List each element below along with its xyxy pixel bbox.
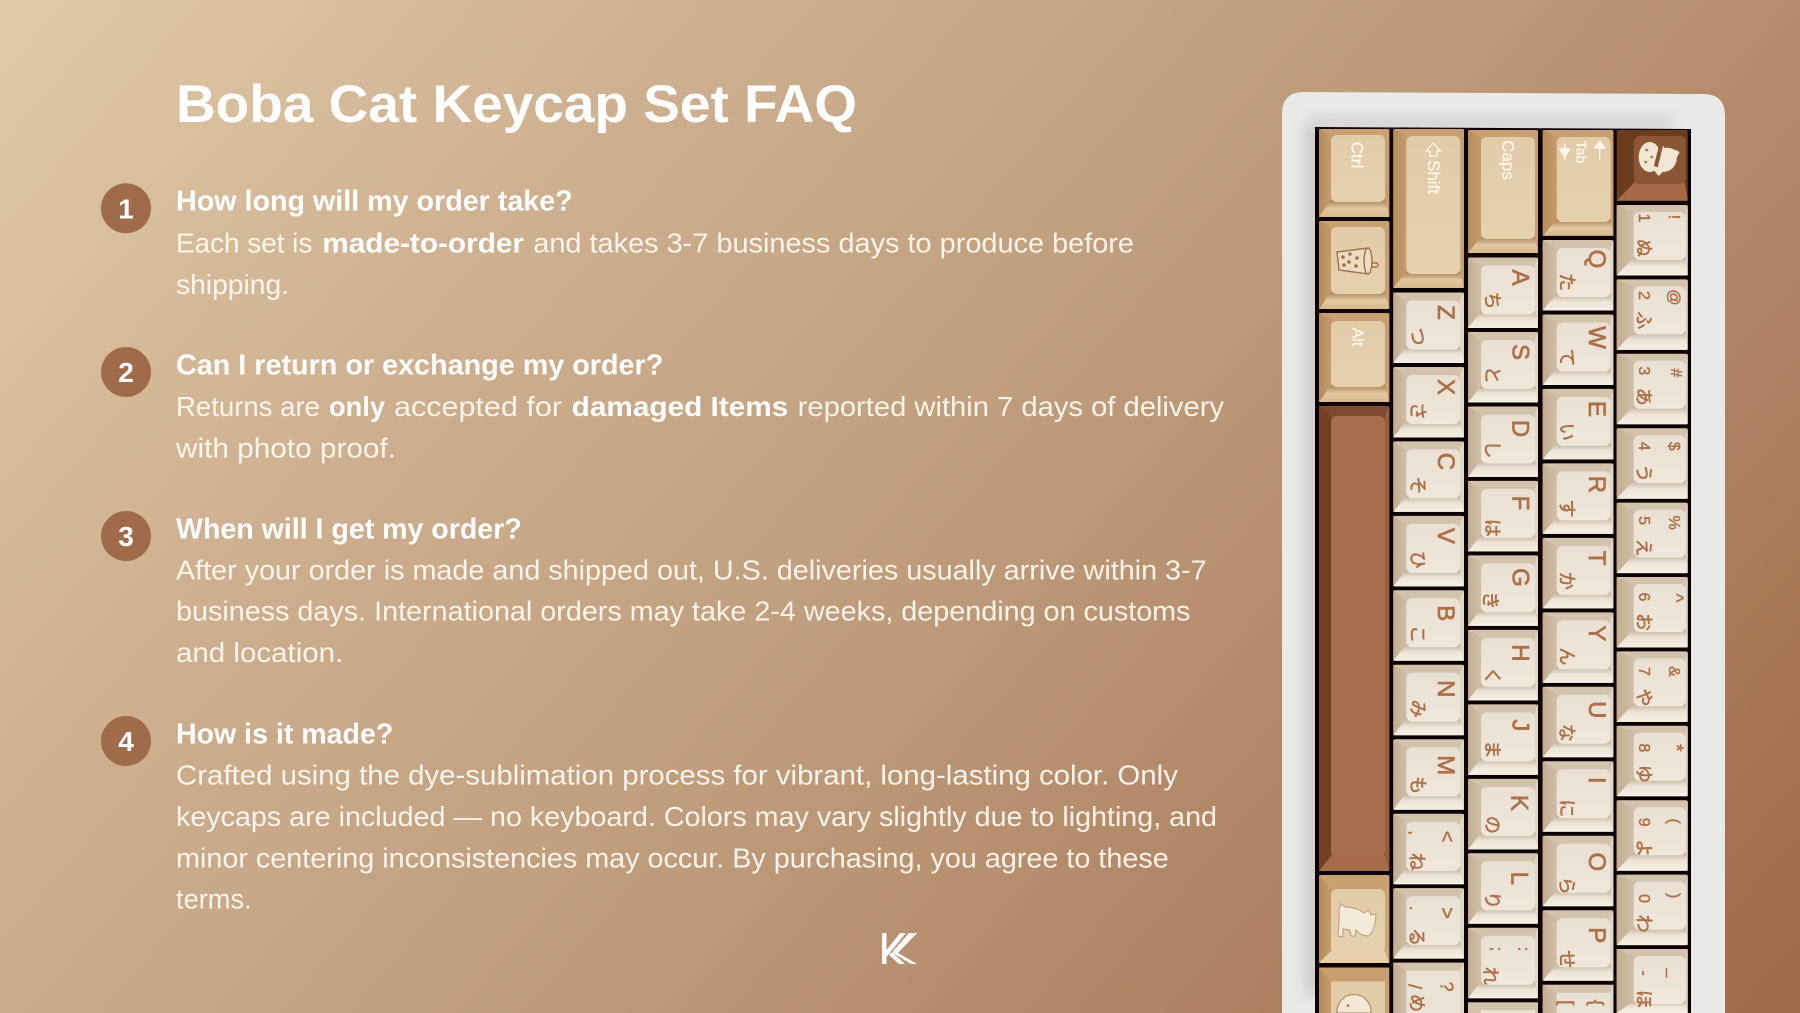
key: Caps bbox=[1468, 130, 1538, 253]
key: 6: 6 bbox=[1635, 593, 1652, 602]
key: U: U bbox=[1583, 701, 1610, 718]
answer 3 bbox=[176, 554, 1207, 668]
answer 2: only bbox=[329, 391, 385, 422]
answer 3: business days. International orders may take 2-4 weeks, depending on customs bbox=[176, 596, 1190, 627]
key: 2: ふ bbox=[1634, 311, 1654, 329]
key: 6: お bbox=[1634, 613, 1654, 631]
key: M bbox=[1393, 739, 1464, 810]
key: Tab bbox=[1543, 130, 1613, 236]
answer 1: Each set is bbox=[176, 227, 312, 258]
key: F: は bbox=[1482, 519, 1502, 537]
key: D: D bbox=[1506, 420, 1534, 437]
key: A: ち bbox=[1482, 292, 1502, 310]
key: 7: や bbox=[1634, 688, 1654, 706]
key: J bbox=[1468, 704, 1538, 775]
key: 4: $ bbox=[1665, 442, 1682, 451]
key: bracket (cut by frame) bbox=[1543, 985, 1613, 1013]
number badge 3: 3 bbox=[118, 521, 134, 552]
key: slash (cut by frame): ? bbox=[1436, 982, 1456, 992]
key: H: く bbox=[1482, 667, 1502, 685]
key: 4: う bbox=[1634, 464, 1654, 482]
key: period: る bbox=[1406, 928, 1426, 946]
answer 1: and takes 3-7 business days to produce before bbox=[533, 227, 1134, 258]
FAQ item 3 bbox=[101, 511, 1207, 668]
key: period: . bbox=[1406, 906, 1423, 910]
key: 1: ぬ bbox=[1634, 239, 1654, 257]
key: K: K bbox=[1506, 795, 1532, 811]
key: I: に bbox=[1557, 799, 1577, 817]
key: O bbox=[1543, 836, 1613, 906]
key: Tab: Tab bbox=[1574, 141, 1590, 163]
keyboard bbox=[1282, 92, 1725, 1013]
question 2: Can I return or exchange my order? bbox=[176, 350, 663, 382]
key: 5 bbox=[1617, 503, 1688, 573]
key: F: F bbox=[1506, 496, 1534, 510]
key: D bbox=[1468, 406, 1538, 477]
key: 7: & bbox=[1665, 666, 1682, 677]
key: Shift bbox=[1393, 129, 1464, 288]
key: C: そ bbox=[1407, 476, 1427, 494]
answer 1 bbox=[176, 227, 1134, 300]
keyboard case bbox=[1282, 92, 1725, 1013]
key: F bbox=[1468, 481, 1538, 551]
key: comma: ね bbox=[1406, 853, 1426, 871]
key: quote (cut by frame) bbox=[1468, 1002, 1538, 1013]
answer 2: Returns are bbox=[176, 391, 320, 422]
key: Y bbox=[1543, 612, 1613, 683]
number badge 2: 2 bbox=[118, 357, 134, 388]
key: 0: ) bbox=[1665, 893, 1682, 898]
key: A bbox=[1468, 258, 1538, 328]
key: semicolon bbox=[1468, 928, 1538, 998]
key: 5: 5 bbox=[1635, 516, 1652, 525]
number badge 2 bbox=[101, 347, 151, 397]
key: T bbox=[1543, 538, 1613, 608]
key: E: い bbox=[1557, 423, 1577, 441]
key: 2 bbox=[1617, 279, 1688, 350]
answer 2 bbox=[175, 391, 1224, 463]
key: B: B bbox=[1432, 605, 1459, 621]
key: slash (cut by frame) bbox=[1393, 963, 1464, 1013]
key: 9: よ bbox=[1634, 839, 1654, 857]
key: bracket (cut by frame): [ bbox=[1557, 1000, 1577, 1005]
answer 4: terms. bbox=[176, 884, 252, 915]
key: I: I bbox=[1583, 777, 1610, 784]
key: smiley icon (cut by frame) bbox=[1319, 968, 1389, 1013]
key: 9: 9 bbox=[1635, 818, 1652, 827]
key: spacebar bbox=[1319, 406, 1389, 871]
title: Boba Cat Keycap Set FAQ bbox=[176, 75, 857, 134]
key: I bbox=[1543, 761, 1613, 832]
key: Q bbox=[1543, 240, 1613, 310]
key: J: ま bbox=[1482, 740, 1502, 758]
answer 1: shipping. bbox=[176, 269, 289, 300]
key: S: S bbox=[1506, 344, 1534, 360]
key: comma: , bbox=[1406, 830, 1423, 835]
answer 4: Crafted using the dye-sublimation process for vibrant, long-lasting color. Only bbox=[176, 760, 1178, 791]
key: X bbox=[1393, 367, 1464, 438]
FAQ item 2 bbox=[101, 347, 1224, 463]
key: period bbox=[1393, 888, 1464, 959]
key: B: こ bbox=[1407, 625, 1427, 643]
key: P: せ bbox=[1557, 950, 1577, 968]
key: 7: 7 bbox=[1635, 667, 1652, 676]
key: Z bbox=[1393, 292, 1464, 363]
key: R: R bbox=[1583, 476, 1610, 493]
key: R: す bbox=[1557, 499, 1577, 517]
answer 3: After your order is made and shipped out, U.S. deliveries usually arrive within 3-7 bbox=[176, 554, 1207, 585]
key: L: L bbox=[1506, 872, 1532, 885]
answer 1: made-to-order bbox=[322, 227, 524, 258]
answer 2: damaged Items bbox=[572, 391, 788, 422]
number badge 3 bbox=[101, 511, 151, 561]
key: S bbox=[1468, 332, 1538, 402]
key: G: G bbox=[1506, 568, 1534, 587]
key: 0: わ bbox=[1634, 915, 1654, 933]
key: Q: Q bbox=[1583, 250, 1610, 268]
key: V bbox=[1393, 516, 1464, 586]
key: W: W bbox=[1583, 326, 1610, 349]
key: 8: * bbox=[1665, 744, 1686, 752]
column 4: Tab and Q row bbox=[1543, 130, 1613, 1013]
key: U: な bbox=[1557, 724, 1577, 742]
key: Ctrl bbox=[1319, 129, 1389, 217]
FAQ item 4 bbox=[101, 716, 1217, 915]
key: M: M bbox=[1432, 755, 1459, 775]
key: E: E bbox=[1583, 401, 1610, 417]
key: minus (cut by frame): - bbox=[1635, 970, 1652, 976]
key: W bbox=[1543, 314, 1613, 385]
number badge 1: 1 bbox=[118, 194, 134, 224]
key: O: O bbox=[1583, 852, 1610, 871]
key: N: み bbox=[1407, 700, 1427, 718]
key: J: J bbox=[1506, 719, 1534, 731]
key: B bbox=[1393, 590, 1464, 661]
key: 9: ( bbox=[1665, 819, 1682, 825]
key: 0: 0 bbox=[1635, 894, 1652, 903]
key: Caps: Caps bbox=[1498, 140, 1518, 180]
key: semicolon: ; bbox=[1488, 947, 1504, 951]
key: V: ひ bbox=[1407, 551, 1427, 569]
key: K: の bbox=[1482, 816, 1502, 834]
key: U bbox=[1543, 687, 1613, 757]
key: semicolon: れ bbox=[1480, 967, 1500, 985]
key: comma bbox=[1393, 814, 1464, 884]
key: P: P bbox=[1583, 927, 1610, 943]
column 3: Caps and A row bbox=[1468, 130, 1538, 1013]
key: H: H bbox=[1506, 644, 1534, 662]
key: Alt: Alt bbox=[1348, 328, 1366, 347]
key: 6 bbox=[1617, 577, 1688, 648]
question 3: When will I get my order? bbox=[176, 513, 522, 545]
key: W: て bbox=[1557, 348, 1577, 366]
question 1: How long will my order take? bbox=[176, 186, 573, 218]
key: G: き bbox=[1480, 591, 1500, 609]
key: 2: @ bbox=[1665, 289, 1682, 306]
answer 4 bbox=[176, 760, 1217, 915]
key: 6: ^ bbox=[1665, 594, 1686, 603]
key: Ctrl: Ctrl bbox=[1348, 142, 1366, 168]
key: M: も bbox=[1407, 776, 1427, 794]
key: 1 bbox=[1617, 205, 1688, 276]
key: cat icon bbox=[1319, 875, 1389, 963]
key: V: V bbox=[1432, 528, 1459, 544]
key: T: か bbox=[1557, 572, 1577, 590]
key: bracket (cut by frame): { bbox=[1587, 1000, 1607, 1006]
answer 2: reported within 7 days of delivery bbox=[798, 391, 1224, 422]
key: L bbox=[1468, 853, 1538, 924]
key: semicolon: : bbox=[1514, 947, 1532, 951]
column 1: modifier keys bbox=[1319, 129, 1389, 1013]
key: P bbox=[1543, 910, 1613, 981]
key: 1: 1 bbox=[1635, 214, 1652, 223]
key: minus (cut by frame) bbox=[1617, 949, 1688, 1013]
answer 2: accepted for bbox=[394, 391, 562, 422]
answer 4: minor centering inconsistencies may occur. By purchasing, you agree to these bbox=[176, 843, 1169, 874]
key: 3: 3 bbox=[1635, 366, 1652, 375]
number badge 4 bbox=[101, 716, 151, 766]
key: 0 bbox=[1617, 875, 1688, 945]
key: 7 bbox=[1617, 651, 1688, 722]
key: minus (cut by frame): _ bbox=[1665, 968, 1682, 979]
key: X: さ bbox=[1407, 402, 1427, 420]
key: T: T bbox=[1583, 551, 1610, 566]
FAQ item 1 bbox=[101, 183, 1134, 300]
key: 3 bbox=[1617, 354, 1688, 424]
key: cat head accent bbox=[1617, 130, 1688, 201]
key: H bbox=[1468, 630, 1538, 700]
key: 4 bbox=[1617, 428, 1688, 499]
key: slash (cut by frame): / bbox=[1404, 984, 1424, 989]
key: Z: つ bbox=[1407, 328, 1427, 346]
key: N: N bbox=[1432, 680, 1459, 697]
key: R bbox=[1543, 463, 1613, 534]
key: 5: % bbox=[1665, 515, 1682, 530]
key: D: し bbox=[1482, 440, 1502, 458]
key: O: ら bbox=[1557, 877, 1577, 895]
answer 2: with photo proof. bbox=[175, 432, 396, 463]
key: E bbox=[1543, 389, 1613, 459]
key: S: と bbox=[1482, 366, 1502, 384]
key: C: C bbox=[1432, 453, 1459, 470]
column 5: number row bbox=[1617, 130, 1688, 1013]
logo bbox=[882, 933, 917, 964]
key: Z: Z bbox=[1432, 305, 1459, 320]
key: Q: た bbox=[1557, 273, 1577, 291]
number badge 4: 4 bbox=[118, 726, 134, 757]
key: 9 bbox=[1617, 800, 1688, 871]
key: 3: あ bbox=[1634, 388, 1654, 406]
key: slash (cut by frame): め bbox=[1406, 994, 1426, 1012]
column 2: Shift and Z row bbox=[1393, 129, 1464, 1013]
key: 4: 4 bbox=[1635, 442, 1652, 451]
key: 5: え bbox=[1634, 539, 1654, 557]
number badge 1 bbox=[101, 183, 151, 233]
key: minus (cut by frame): ほ bbox=[1634, 990, 1654, 1008]
key: 8 bbox=[1617, 726, 1688, 796]
key: L: り bbox=[1482, 891, 1502, 909]
key: 8: ゆ bbox=[1634, 765, 1654, 783]
question 4: How is it made? bbox=[176, 718, 393, 750]
key: X: X bbox=[1432, 379, 1459, 395]
key: comma: < bbox=[1435, 831, 1457, 843]
answer 4: keycaps are included — no keyboard. Colors may vary slightly due to lighting, and bbox=[176, 801, 1217, 832]
key: boba cup icon bbox=[1319, 221, 1389, 309]
key: 8: 8 bbox=[1635, 743, 1652, 752]
key: G bbox=[1468, 555, 1538, 626]
key: Alt bbox=[1319, 313, 1389, 402]
answer 3: and location. bbox=[176, 637, 343, 668]
key: Y: Y bbox=[1583, 625, 1610, 641]
key: C bbox=[1393, 441, 1464, 512]
key: 2: 2 bbox=[1635, 291, 1652, 300]
key: period: > bbox=[1435, 907, 1457, 919]
key: A: A bbox=[1506, 269, 1534, 286]
key: 1: ! bbox=[1665, 215, 1682, 219]
key: Shift: Shift bbox=[1424, 160, 1443, 194]
key: Y: ん bbox=[1557, 647, 1577, 665]
key: 3: # bbox=[1667, 368, 1684, 377]
key: K bbox=[1468, 779, 1538, 849]
key: N bbox=[1393, 665, 1464, 735]
